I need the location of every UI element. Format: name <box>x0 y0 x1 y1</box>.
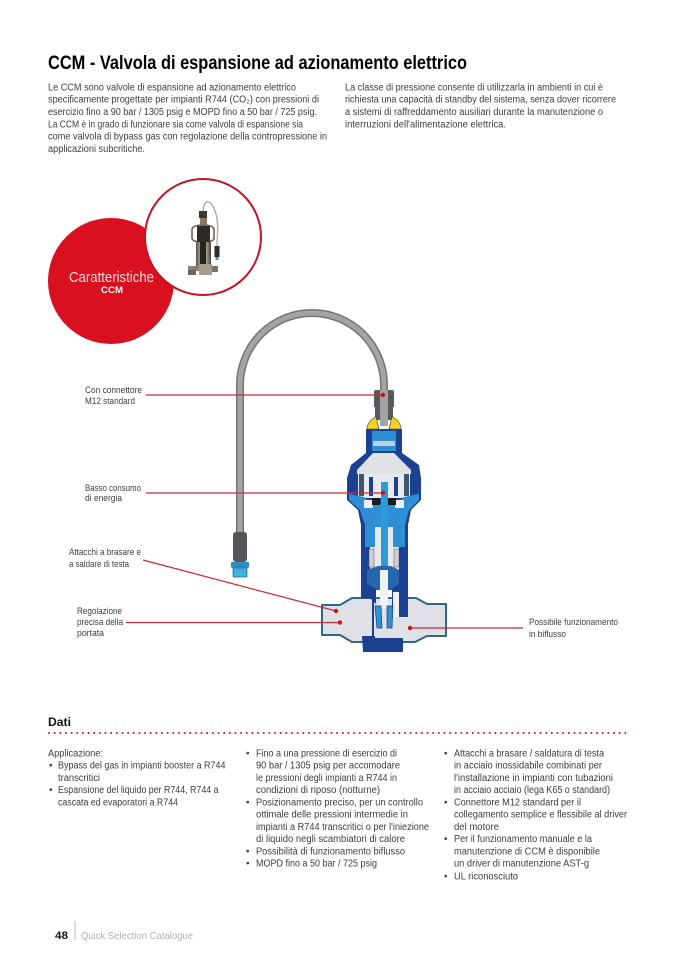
text block: data column 1: cascata ed evaporatori a R744 <box>58 798 178 808</box>
text block: data column 3: UL riconosciuto <box>454 872 518 882</box>
callout: Possibile funzionamento in biflusso: Possibile funzionamento <box>529 617 618 627</box>
outer housing <box>347 429 421 617</box>
text block: data column 1: Bypass del gas in impianti booster a R744 <box>58 761 226 772</box>
text block: intro left <box>48 82 327 155</box>
text block: data column 3: Attacchi a brasare / saldatura di testa <box>454 748 604 760</box>
text block: data column 2: • <box>246 846 250 858</box>
text block: data column 3: • <box>444 834 448 845</box>
text block: data column 2: • <box>246 798 250 808</box>
text block: data column 2 <box>246 748 429 870</box>
icon: product photo of the valve <box>188 202 220 275</box>
text block: data column 1 <box>48 748 226 808</box>
badge: Caratteristiche CCM <box>48 179 261 344</box>
text block: intro left: applicazioni subcritiche. <box>48 144 145 155</box>
text block: data column 3 <box>444 748 628 882</box>
text block: data column 1: Applicazione: <box>48 748 103 760</box>
text block: data column 3: un driver di manutenzione AST-g <box>454 859 589 870</box>
yellow seal <box>367 417 379 429</box>
text block: data column 2: Posizionamento preciso, per un controllo <box>256 798 423 808</box>
catalogue name: Quick Selection Catalogue <box>81 930 193 942</box>
text block: data column 3: in acciaio acciaio (lega K65 o standard) <box>454 785 610 796</box>
callout: Regolazione precisa della portata: portata <box>77 628 104 638</box>
text block: data column 2: • <box>246 859 250 870</box>
text block: data column 2: ottimale delle pressioni intermedie in <box>256 810 408 821</box>
cable plug <box>231 532 249 577</box>
callout: Con connettore M12 standard: Con connettore <box>85 385 142 395</box>
text block: data column 2: Possibilità di funzionamento biflusso <box>256 846 405 858</box>
red circle <box>48 218 174 344</box>
badge label <box>69 270 154 296</box>
text block: data column 1: • <box>49 785 53 796</box>
text block: data column 1: Espansione del liquido per R744, R744 a <box>58 785 219 796</box>
diagram: valve cross-section <box>231 313 446 652</box>
text block: data column 3: Connettore M12 standard per il <box>454 798 581 808</box>
callout: Basso consumo di energia <box>85 483 385 503</box>
text block: intro right: La classe di pressione consente di utilizzarla in ambienti in cui è <box>345 82 603 94</box>
heading: Dati: Dati <box>48 715 71 729</box>
text block: data column 2: di liquido negli scambiatori di calore <box>256 834 405 845</box>
text block: data column 1: • <box>49 761 53 772</box>
text block: data column 3: in acciaio inossidabile combinati per <box>454 761 603 772</box>
stem channel <box>370 527 399 571</box>
valve body <box>322 390 446 652</box>
callout: Attacchi a brasare <box>69 547 338 613</box>
text block: data column 2: condizioni di riposo (notturne) <box>256 785 380 796</box>
text block: data column 2: Fino a una pressione di esercizio di <box>256 748 397 760</box>
text block: intro left: La CCM è in grado di funzionare sia come valvola di espansione sia <box>48 119 303 130</box>
callout: Attacchi a brasare: Attacchi a brasare e <box>69 547 141 557</box>
lower mechanism <box>367 566 399 590</box>
text block: data column 3: • <box>444 798 448 808</box>
text block: intro right <box>345 82 616 130</box>
text block: intro left: esercizio fino a 90 bar / 1305 psig e MOPD fino a 50 bar / 725 psig. <box>48 107 317 118</box>
callout: Con connettore M12 standard <box>85 385 385 406</box>
text block: data column 2: le pressioni degli impianti a R744 in <box>256 773 397 784</box>
callout: Regolazione precisa della portata <box>77 606 342 638</box>
text block: intro left: specificamente progettate per impianti R744 (CO₂) con pressioni di <box>48 95 319 106</box>
text block: intro right: a sistemi di raffreddamento ausiliari durante la manutenzione o <box>345 107 603 118</box>
text block: data column 3: • <box>444 872 448 882</box>
text block: intro right: richiesta una capacità di standby del sistema, senza dover ricorrere <box>345 95 616 106</box>
text block: data column 3: Per il funzionamento manuale e la <box>454 834 592 845</box>
footer <box>55 921 193 942</box>
text block: data column 2: • <box>246 748 250 760</box>
callout: Possibile funzionamento in biflusso: in biflusso <box>529 629 566 639</box>
top chamber <box>372 431 396 451</box>
page number: 48 <box>55 930 68 942</box>
flow body <box>322 598 446 642</box>
text block: data column 3: • <box>444 748 448 760</box>
badge label: CCM <box>101 285 123 296</box>
callout: Con connettore M12 standard: M12 standard <box>85 396 135 406</box>
text block: data column 2: impianti a R744 transcritici o per l'iniezione <box>256 822 429 833</box>
callout: Basso consumo di energia: di energia <box>85 493 122 503</box>
text block: data column 2: 90 bar / 1305 psig per accomodare <box>256 761 400 772</box>
seat partition <box>372 600 374 637</box>
text block: data column 3: l'installazione in impianti con tubazioni <box>454 773 613 784</box>
title: CCM - Valvola di espansione ad azionamento elettrico <box>48 52 467 74</box>
callout: Basso consumo di energia: Basso consumo <box>85 483 141 493</box>
bottom block <box>362 636 403 652</box>
text block: intro left: come valvola di bypass gas con regolazione della contropressione in <box>48 132 327 142</box>
callout: Possibile funzionamento in biflusso <box>408 617 618 639</box>
badge label: Caratteristiche <box>69 270 154 286</box>
callout: Regolazione precisa della portata: precisa della <box>77 617 123 627</box>
text block: intro right: interruzioni dell'alimentazione elettrica. <box>345 119 506 130</box>
connector nut <box>374 390 394 420</box>
text block: data column 3: collegamento semplice e flessibile al driver <box>454 810 628 821</box>
callout: Regolazione precisa della portata: Regolazione <box>77 606 122 616</box>
text block: data column 3: manutenzione di CCM è disponibile <box>454 846 600 858</box>
callout: Attacchi a brasare: a saldare di testa <box>69 559 129 569</box>
text block: data column 3: del motore <box>454 822 499 833</box>
text block: data column 2: MOPD fino a 50 bar / 725 psig <box>256 859 377 870</box>
text block: intro left: Le CCM sono valvole di espansione ad azionamento elettrico <box>48 82 296 94</box>
text block: data column 1: transcritici <box>58 773 100 784</box>
mechanism <box>358 474 410 498</box>
nozzle <box>375 606 382 628</box>
white circle with product photo <box>145 179 261 295</box>
cable <box>240 313 384 532</box>
